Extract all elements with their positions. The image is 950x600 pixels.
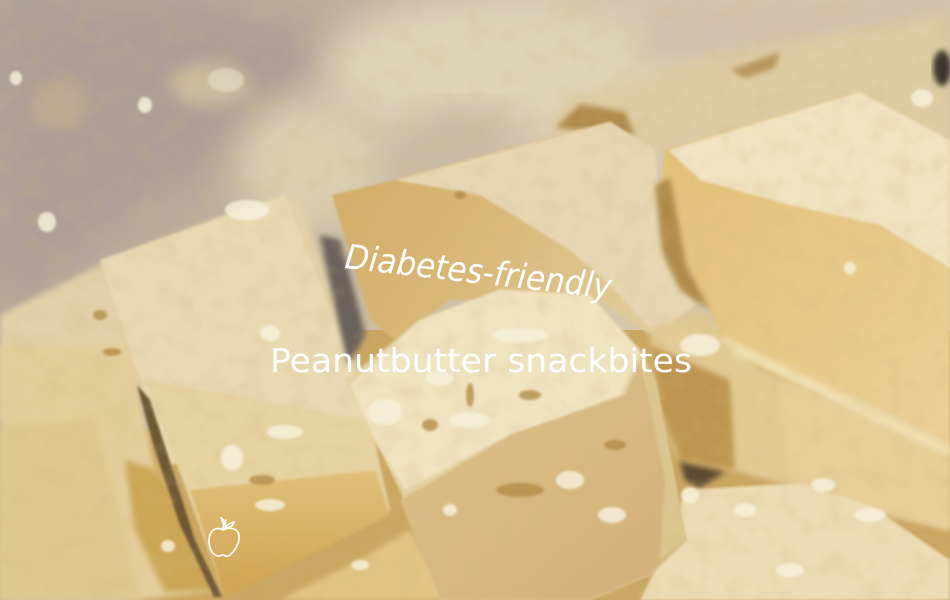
back bar, top right	[548, 15, 950, 160]
dark gap between bars	[320, 235, 366, 365]
title: Peanutbutter snackbites: Peanutbutter snackbites	[270, 341, 692, 380]
crumb shadows	[93, 191, 626, 497]
center back bar	[332, 122, 695, 340]
left background bar	[0, 200, 375, 600]
right lower bar	[650, 310, 950, 530]
bottom center small bar	[280, 530, 450, 600]
left bar with orange front face	[100, 195, 390, 597]
bottom right crumbly bar	[640, 483, 950, 600]
icon: apple	[209, 518, 239, 556]
far left corner bar	[0, 415, 220, 600]
front center bar	[345, 290, 686, 600]
subtitle: Diabetes-friendly: Diabetes-friendly	[343, 237, 615, 307]
right upper bar	[655, 92, 950, 458]
